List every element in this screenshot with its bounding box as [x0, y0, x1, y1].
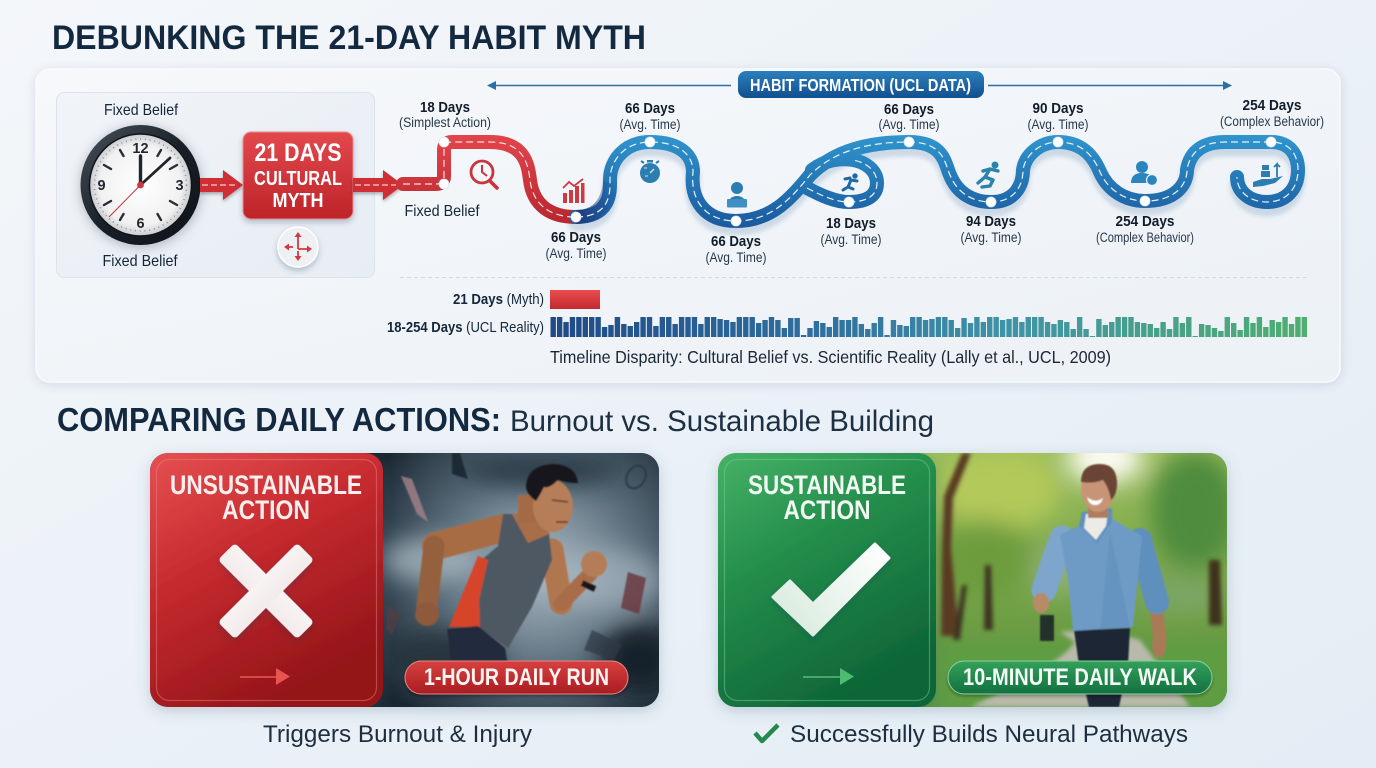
bars: reality	[553, 317, 1304, 337]
icon: wall clock: 6	[136, 216, 145, 232]
icon: wall clock	[80, 125, 201, 247]
myth badge: MYTH	[272, 189, 324, 212]
panel: fixed belief	[56, 92, 374, 278]
icon: person with badge	[1131, 161, 1158, 186]
label: 66 days d	[878, 101, 940, 132]
label: 66 days a	[546, 229, 606, 261]
icon: green arrow	[803, 668, 854, 685]
label: 254 days complex end	[1220, 97, 1324, 129]
label: 1-hour daily run	[405, 661, 628, 694]
label: 66 days d: (Avg. Time)	[878, 117, 940, 132]
label: 254 days complex end: 254 Days	[1242, 97, 1302, 114]
icon: white check	[773, 544, 889, 635]
header: habit formation range: HABIT FORMATION (UCL DATA)	[750, 75, 971, 95]
label: 18 days avg: 18 Days	[826, 215, 876, 232]
header: habit formation range	[487, 71, 1232, 98]
photo: man walking in a park	[920, 453, 1227, 707]
heading: comparing daily actions: Burnout vs. Sustainable Building	[510, 405, 934, 438]
label: 66 days b: 66 Days	[625, 100, 675, 117]
text: sustainable action	[748, 475, 906, 520]
label: fixed belief road: Fixed Belief	[404, 203, 480, 220]
label: 1-hour daily run: 1-HOUR DAILY RUN	[424, 664, 609, 691]
label: 10-minute daily walk	[948, 661, 1212, 694]
figure: walking man	[1033, 464, 1166, 707]
label: 66 days a: (Avg. Time)	[546, 246, 606, 261]
icon: white cross	[218, 543, 314, 639]
label: reality: 18-254 Days (UCL Reality)	[387, 320, 544, 336]
text: unsustainable action	[171, 475, 362, 520]
icon: wall clock: 9	[97, 178, 106, 194]
panel: habit timeline	[36, 69, 1340, 382]
arrow: myth to road	[353, 170, 403, 200]
label: 254 days complex mid	[1096, 213, 1194, 245]
icon: red arrow	[240, 668, 290, 685]
icon: hand with boxes	[1253, 164, 1283, 187]
road: blue segment	[576, 142, 1298, 221]
label: 254 days complex mid: (Complex Behavior)	[1096, 230, 1194, 245]
label: 18 days simplest	[399, 99, 491, 130]
icon: wall clock: 3	[175, 178, 184, 194]
icon: green check	[755, 725, 778, 741]
label: fixed belief top: Fixed Belief	[104, 102, 178, 119]
label: 66 days b: (Avg. Time)	[620, 117, 680, 132]
road nodes	[439, 137, 1276, 226]
icon: person at desk	[727, 182, 747, 208]
panel: sustainable action card	[718, 432, 1240, 712]
road: red segment	[403, 142, 576, 217]
road: centre dashes	[403, 142, 576, 217]
icon: runner small	[843, 174, 857, 190]
label: 18 days avg: (Avg. Time)	[820, 232, 882, 247]
label: 18 days simplest: 18 Days	[420, 99, 470, 116]
myth badge: 21 DAYS	[254, 139, 342, 167]
heading: comparing daily actions	[57, 401, 934, 438]
label: 90 days: 90 Days	[1032, 100, 1084, 117]
chart: myth vs reality bars	[387, 290, 1304, 367]
icon: scattered arrows	[278, 227, 318, 267]
label: 66 days c: (Avg. Time)	[706, 250, 766, 265]
arrow: clock to myth	[200, 170, 243, 200]
label: 18 days simplest: (Simplest Action)	[399, 115, 491, 130]
label: 254 days complex mid: 254 Days	[1116, 213, 1174, 230]
panel: red verdict	[150, 453, 383, 707]
text: unsustainable action: UNSUSTAINABLE	[170, 470, 362, 500]
label: 94 days	[960, 213, 1022, 245]
bar: myth	[550, 290, 600, 309]
label: 90 days: (Avg. Time)	[1028, 117, 1088, 132]
label: 66 days a: 66 Days	[551, 229, 601, 246]
label: 66 days b	[620, 100, 680, 132]
myth badge	[243, 132, 353, 219]
caption: builds neural pathways: Successfully Builds Neural Pathways	[790, 721, 1188, 748]
figure: runner	[414, 463, 608, 660]
icon: rising bars	[563, 179, 584, 203]
label: fixed belief bottom: Fixed Belief	[102, 253, 178, 270]
panel: green verdict	[718, 453, 936, 707]
label: 254 days complex end: (Complex Behavior)	[1220, 114, 1324, 129]
heading: comparing daily actions: COMPARING DAILY ACTIONS:	[57, 401, 501, 438]
road: loop	[807, 159, 877, 202]
road: blue dashes	[576, 142, 1298, 221]
divider	[400, 276, 1310, 278]
panel: unsustainable action card	[150, 453, 680, 707]
icon: wall clock: 12	[132, 141, 149, 157]
label: 66 days d: 66 Days	[884, 101, 934, 118]
photo: runner in a storm	[383, 453, 659, 707]
label: 18 days avg	[820, 215, 882, 247]
road shadow	[576, 149, 1298, 228]
icon: magnifier clock	[471, 161, 497, 188]
icon: stopwatch	[640, 160, 660, 183]
title: DEBUNKING THE 21-DAY HABIT MYTH	[52, 19, 646, 57]
label: myth: 21 Days (Myth)	[453, 292, 544, 308]
caption: triggers burnout: Triggers Burnout & Injury	[263, 721, 532, 748]
text: unsustainable action: ACTION	[222, 495, 310, 525]
label: 10-minute daily walk: 10-MINUTE DAILY WALK	[963, 664, 1197, 691]
road: dark start of blue	[576, 182, 610, 217]
label: 66 days c: 66 Days	[711, 233, 761, 250]
caption: timeline disparity: Timeline Disparity: Cultural Belief vs. Scientific Reality (Lally et al., UCL, 2009)	[550, 347, 1111, 367]
label: 66 days c	[706, 233, 766, 265]
myth badge: CULTURAL	[254, 167, 342, 190]
label: 94 days: (Avg. Time)	[960, 230, 1022, 245]
chart: winding habit road	[403, 137, 1298, 228]
label: 90 days	[1028, 100, 1088, 132]
label: 94 days: 94 Days	[966, 213, 1016, 230]
icon: runner large	[978, 162, 998, 187]
text: sustainable action: SUSTAINABLE	[748, 470, 906, 500]
text: sustainable action: ACTION	[784, 495, 870, 525]
